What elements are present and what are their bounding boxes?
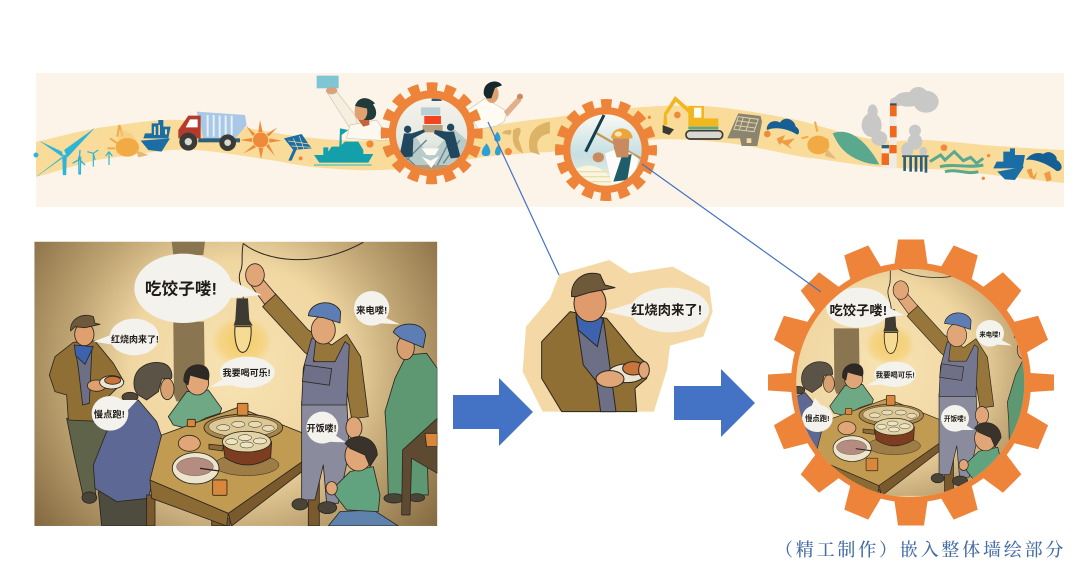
banner icons, right half — [648, 87, 1062, 182]
speech bubble: 慢点跑: 慢点跑! — [94, 409, 125, 420]
panel: full dumpling scene illustration — [34, 242, 437, 526]
banner icons, left half — [34, 76, 550, 176]
arrow 2 — [674, 369, 755, 437]
speech bubble: 我要喝可乐: 我要喝可乐! — [876, 370, 915, 379]
speech bubble: 开饭喽: 开饭喽! — [307, 422, 337, 433]
speech bubble: 吃饺子喽: 吃饺子喽! — [829, 302, 887, 318]
speech bubble: 吃饺子喽: 吃饺子喽! — [145, 278, 217, 298]
icon: smoke clouds — [862, 87, 939, 157]
banner: wall mural strip — [34, 73, 1064, 207]
icon: tan waves — [502, 122, 550, 155]
figure: man with plate — [542, 273, 649, 412]
speech bubble: 吃饺子喽 — [826, 288, 904, 328]
icon: light-bulb sun — [107, 125, 148, 157]
icon: green mountains — [930, 152, 983, 173]
figure: man with raised arm — [467, 82, 523, 129]
speech bubble: 来电喽 — [354, 291, 400, 326]
ribbon: yellow wave — [36, 106, 1064, 183]
big gear with embedded scene — [768, 240, 1054, 526]
icon: ship — [314, 128, 373, 165]
icon: striped chimney — [882, 103, 897, 168]
speech bubble: 来电喽: 来电喽! — [979, 329, 1001, 338]
caption: （精工制作）嵌入整体墙绘部分 — [775, 540, 1066, 560]
speech bubble: 红烧肉来了: 红烧肉来了! — [631, 301, 702, 317]
gear 2: worker with tool — [562, 106, 650, 194]
arrow 1 — [453, 378, 533, 446]
icon: cooling towers — [902, 155, 929, 173]
gear 1: workers lifting boxes — [388, 89, 476, 177]
icon: sun — [240, 120, 282, 159]
speech bubble: 开饭喽 — [941, 405, 974, 432]
speech bubble: 开饭喽 — [306, 412, 346, 444]
speech bubble: 来电喽: 来电喽! — [356, 304, 387, 315]
speech bubble: 我要喝可乐 — [210, 357, 275, 388]
figure: woman raising panel — [317, 76, 386, 141]
connector line to cut-out — [488, 122, 559, 275]
speech bubble: 慢点跑 — [92, 396, 137, 431]
icon: solar roof house — [727, 113, 762, 146]
icon: leaf — [833, 132, 879, 164]
icon: light-bulb sun — [802, 122, 837, 159]
icon: cloud — [1026, 152, 1062, 171]
icon: sparks — [777, 135, 795, 149]
icon: solar panel — [284, 134, 312, 161]
panel: cut-out man with speech bubble — [523, 260, 713, 412]
icon: excavator — [663, 96, 723, 139]
speech bubble: 我要喝可乐 — [866, 362, 916, 387]
speech bubble: 吃饺子喽 — [134, 254, 262, 323]
icon: cloud — [767, 119, 799, 134]
icon: wind turbines — [34, 129, 112, 176]
icon: city on ship — [993, 148, 1025, 180]
speech bubble: 开饭喽: 开饭喽! — [944, 414, 966, 423]
speech bubble: 慢点跑: 慢点跑! — [805, 414, 830, 423]
icon: city on ship — [141, 120, 171, 152]
speech bubble: 我要喝可乐: 我要喝可乐! — [223, 367, 271, 378]
icon: sparks — [1027, 168, 1052, 182]
speech bubble: 红烧肉来了 — [605, 288, 709, 332]
icon: water drops — [482, 132, 501, 156]
speech bubble: 红烧肉来了 — [93, 319, 159, 355]
speech bubble: 慢点跑 — [802, 398, 833, 432]
speech bubble: 红烧肉来了: 红烧肉来了! — [111, 333, 159, 344]
speech bubble: 来电喽 — [976, 320, 1012, 347]
connector line to big gear — [642, 164, 821, 292]
icon: dump truck — [178, 112, 247, 151]
